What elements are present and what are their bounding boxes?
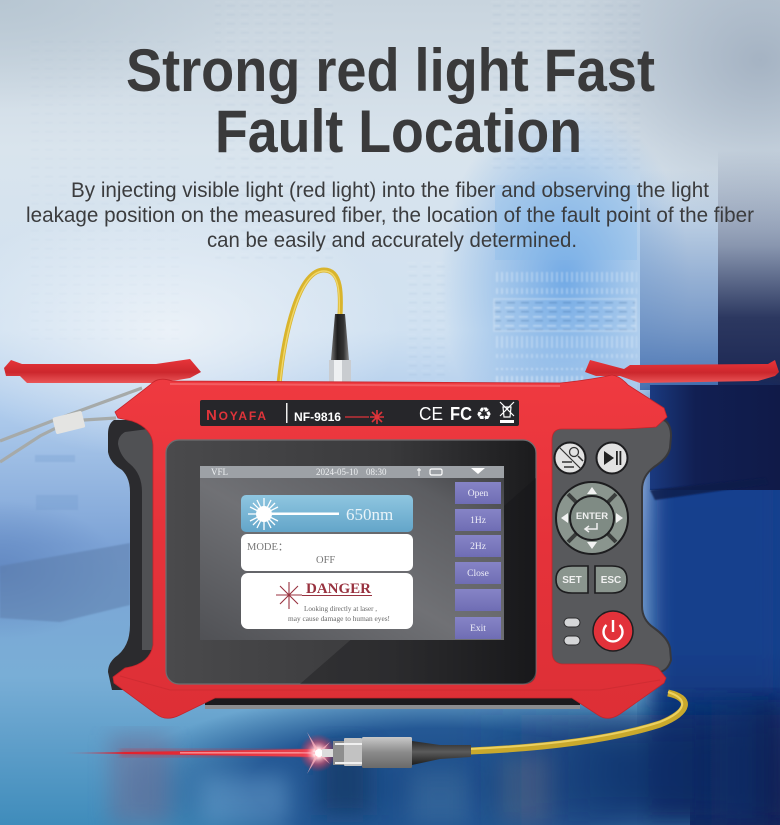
- status LEDs: [564, 618, 580, 645]
- status bar: [200, 466, 504, 478]
- side menu buttons: Exit: [470, 624, 486, 634]
- side menu buttons: 1Hz: [470, 516, 486, 526]
- title: [126, 37, 655, 165]
- FC fiber connector: [322, 737, 471, 768]
- background: server racks: [30, 0, 768, 500]
- lanyard strap: [0, 388, 142, 462]
- directional pad with enter key: ENTER: [576, 511, 608, 522]
- model name: NF-9816: [294, 410, 341, 424]
- right flip handle: [585, 360, 779, 383]
- mode panel: MODE：: [247, 542, 288, 553]
- title: Fault Location: [215, 98, 582, 165]
- red device body: [113, 375, 667, 718]
- SET button: [556, 566, 588, 593]
- certification marks: CE: [419, 404, 443, 424]
- certification marks: ♻: [476, 404, 492, 425]
- side menu buttons: [455, 482, 501, 639]
- SET button: SET: [562, 575, 582, 586]
- laser symbol: [345, 410, 384, 424]
- status bar: VFL: [211, 467, 228, 477]
- lanyard clip: [52, 411, 85, 434]
- left flip handle: [4, 359, 201, 383]
- background: keyboard on the left: [0, 455, 130, 622]
- bottom yellow fiber cable: [470, 692, 684, 751]
- ESC button: [595, 566, 627, 593]
- side menu buttons: 2Hz: [470, 542, 486, 552]
- laser flare: [299, 732, 337, 774]
- brand logo: NOYAFA: [206, 407, 266, 424]
- directional pad with enter key: [556, 482, 628, 554]
- power button: [593, 611, 633, 651]
- danger warning panel: [241, 573, 413, 629]
- side menu buttons: Open: [468, 489, 489, 499]
- status bar: 08:30: [366, 467, 387, 477]
- bottom under-edge of device: [205, 696, 580, 709]
- top label strip: [200, 400, 519, 426]
- certification marks: [419, 402, 514, 425]
- left black grip: [108, 420, 165, 690]
- description text: [26, 179, 754, 252]
- status bar: 2024-05-10: [316, 467, 358, 477]
- search / swap button: [554, 442, 586, 474]
- floor reflection of device: [110, 735, 550, 825]
- wavelength panel: [241, 495, 413, 532]
- title: Strong red light Fast: [126, 37, 655, 104]
- description text: leakage position on the measured fiber, the location of the fault point of the fiber: [26, 204, 754, 227]
- wavelength panel: 650nm: [346, 505, 393, 524]
- right control panel: [545, 420, 671, 672]
- device screen: [200, 466, 504, 640]
- mode panel: OFF: [316, 555, 335, 566]
- danger warning panel: may cause damage to human eyes!: [288, 615, 390, 623]
- screen bezel: [166, 440, 536, 684]
- description text: can be easily and accurately determined.: [207, 229, 577, 252]
- ESC button: ESC: [601, 575, 621, 586]
- device body contour lines: [120, 384, 660, 690]
- left grip highlight: [118, 428, 156, 650]
- side menu buttons: Close: [467, 569, 489, 579]
- danger warning panel: DANGER: [306, 581, 371, 597]
- description text: By injecting visible light (red light) into the fiber and observing the light: [71, 179, 709, 202]
- danger warning panel: Looking directly at laser ,: [304, 605, 377, 613]
- mode panel: [241, 534, 413, 571]
- play / pause button: [596, 442, 628, 474]
- certification marks: FC: [450, 404, 472, 424]
- red laser beam: [60, 749, 320, 757]
- top fiber cable and connector: [279, 270, 351, 384]
